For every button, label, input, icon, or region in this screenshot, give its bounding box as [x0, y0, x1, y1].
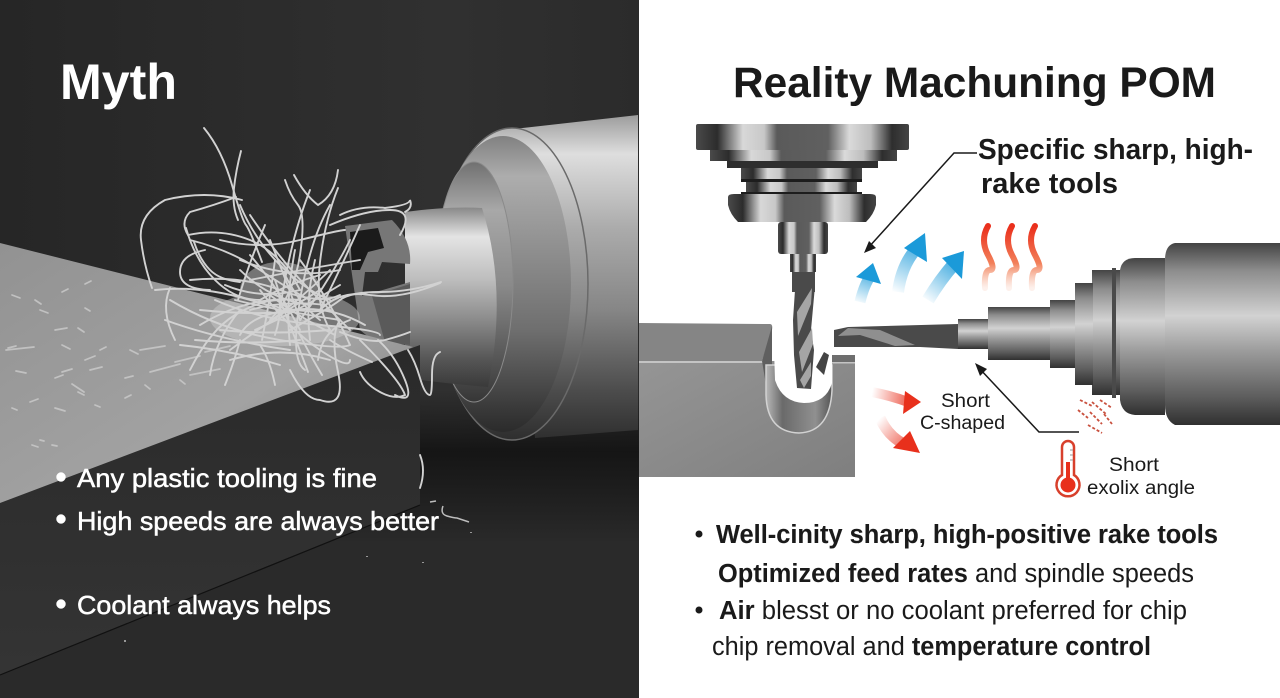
label: short helix angle: exolix angle [1087, 478, 1195, 499]
reality bullet list: Well-cinity sharp, high-positive rake tools [716, 521, 1218, 549]
label: short C-shaped: C-shaped [920, 413, 1005, 434]
heading: reality: Reality Machuning POM [733, 59, 1216, 107]
callout arrow: helix [975, 363, 1079, 432]
reality bullet list: Optimized feed rates and spindle speeds [718, 560, 1194, 588]
chip piece [816, 352, 829, 375]
chip mass [210, 262, 360, 346]
icon: thermometer [1056, 441, 1080, 496]
callout: specific sharp tools [864, 134, 1253, 253]
icon: debris [1078, 400, 1112, 433]
red chip arrows [872, 391, 921, 453]
panel: reality [639, 0, 1280, 698]
label: short helix angle: Short [1109, 455, 1160, 476]
label: short C-shaped [920, 391, 1005, 434]
blue airflow arrows [856, 233, 964, 302]
myth bullet list: Any plastic tooling is fine [77, 463, 377, 493]
reality bullet list: chip removal and temperature control [712, 633, 1151, 661]
surface flecks [6, 281, 230, 447]
tangled stringy chips [141, 128, 441, 488]
workpiece [639, 318, 855, 477]
label: short helix angle [1087, 455, 1195, 499]
vertical spindle and drill [696, 124, 909, 389]
horizontal spindle and drill [834, 243, 1280, 425]
spindle: lathe tool [345, 115, 638, 440]
callout: specific sharp tools: rake tools [981, 168, 1118, 200]
workpiece block [0, 243, 420, 675]
panel: myth [0, 0, 639, 698]
heading: myth: Myth [60, 54, 177, 110]
myth bullet list [56, 463, 439, 620]
myth bullet list: Coolant always helps [77, 590, 331, 620]
reality bullet list [696, 521, 1218, 661]
myth bullet list: High speeds are always better [77, 506, 439, 536]
label: short C-shaped: Short [941, 391, 991, 412]
callout: specific sharp tools: Specific sharp, high- [978, 134, 1253, 166]
reality bullet list: Air blesst or no coolant preferred for chip [719, 597, 1187, 625]
stray chips [125, 501, 471, 642]
heat waves [984, 226, 1040, 288]
